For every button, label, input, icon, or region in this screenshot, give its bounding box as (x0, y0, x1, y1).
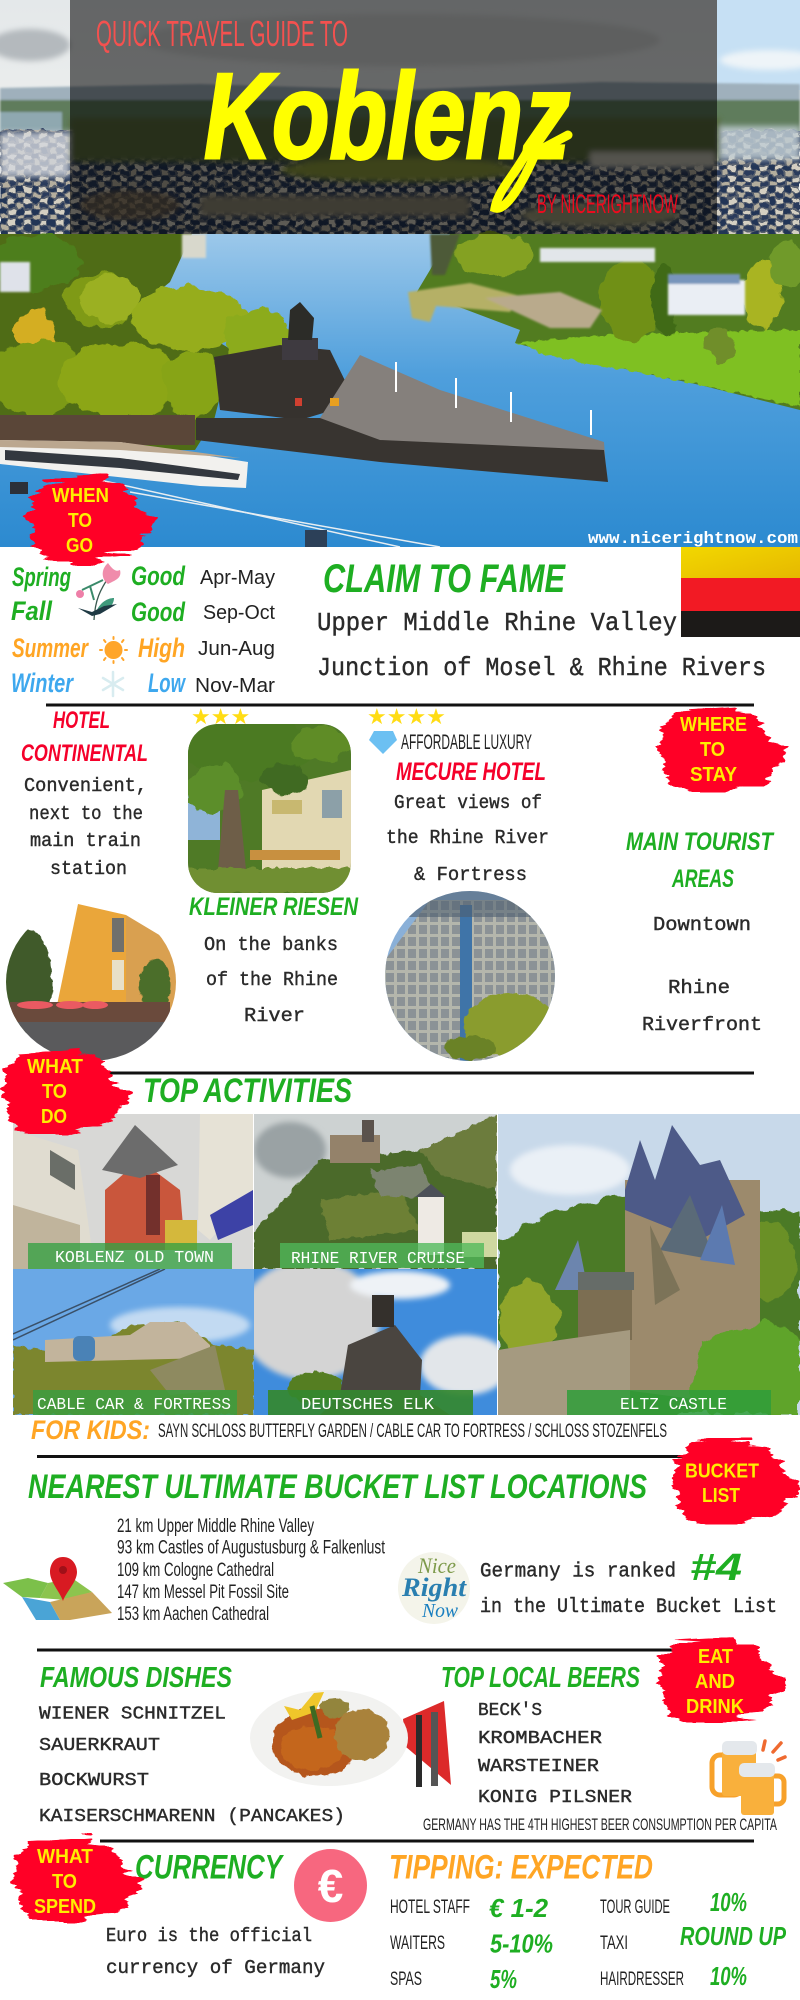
ranking text: Germany is ranked (480, 1560, 676, 1584)
badge: eat and drink: DRINK (686, 1696, 744, 1718)
label: KOBLENZ OLD TOWN (55, 1249, 214, 1268)
photo: Cable Car and Fortress (13, 1269, 254, 1415)
winter row: Low (148, 668, 186, 698)
badge: where to stay: WHERE (680, 714, 747, 736)
distance list: 21 km Upper Middle Rhine Valley (117, 1516, 314, 1537)
hotel description (386, 792, 549, 886)
panel: claim to fame (317, 557, 766, 683)
winter row (11, 668, 275, 698)
label (268, 1390, 473, 1415)
dishes list: SAUERKRAUT (39, 1736, 160, 1756)
claim 1: Upper Middle Rhine Valley (317, 608, 677, 638)
fall row: Sep-Oct (203, 602, 275, 624)
badge: what to spend: TO (52, 1871, 77, 1893)
tip rows left (390, 1893, 553, 1994)
logo: Nice Right Now (398, 1552, 470, 1624)
panel: when to go seasons (11, 561, 275, 698)
three stars: ★★★ (191, 705, 250, 730)
hotel description (204, 934, 338, 1027)
tipping heading: TIPPING: EXPECTED (389, 1849, 653, 1887)
badge: where to stay: TO (700, 739, 725, 761)
ranking text (480, 1547, 777, 1619)
areas list: Downtown (653, 914, 751, 936)
tip rows left: 5% (490, 1964, 517, 1994)
beers list: KROMBACHER (478, 1729, 602, 1749)
hotel description: Convenient, (24, 775, 147, 797)
badge: what to spend: SPEND (34, 1896, 96, 1918)
panel: Kleiner Riesen (184, 705, 359, 1027)
badge: when to go: GO (66, 535, 93, 557)
distance list (117, 1516, 386, 1625)
logo: Nice Right Now: Nice (417, 1553, 456, 1578)
summer row (12, 633, 275, 663)
cruise ship (0, 440, 248, 488)
photo: Rhine River Cruise (254, 1114, 497, 1269)
panel: currency (106, 1849, 367, 1979)
tip rows right: 10% (710, 1887, 747, 1917)
badge: where to stay (658, 707, 785, 791)
hotel name: CONTINENTAL (21, 740, 148, 767)
spring row (12, 561, 275, 592)
dishes heading: FAMOUS DISHES (40, 1662, 233, 1694)
label: CABLE CAR & FORTRESS (37, 1396, 231, 1415)
icon: beer mugs (712, 1741, 785, 1815)
tip rows right: TAXI (600, 1933, 628, 1954)
fall row (11, 596, 275, 627)
hotel description: River (244, 1005, 305, 1027)
badge: what to spend (13, 1838, 140, 1922)
label (567, 1390, 771, 1415)
currency text: currency of Germany (106, 1957, 325, 1979)
hotel photo (6, 904, 176, 1060)
beers list: BECK'S (478, 1701, 542, 1721)
badge: bucket list: BUCKET (685, 1460, 759, 1482)
badge: when to go (27, 477, 154, 561)
badge: what to do (2, 1050, 129, 1134)
tip rows left: WAITERS (390, 1933, 445, 1954)
badge: what to do: DO (41, 1106, 67, 1128)
label (280, 1243, 484, 1269)
logo: Nice Right Now: Right (401, 1573, 467, 1602)
photo: Eltz Castle (498, 1114, 800, 1415)
areas heading: AREAS (671, 865, 734, 893)
affordable luxury tag: AFFORDABLE LUXURY (401, 731, 532, 754)
hotel name: MECURE HOTEL (396, 758, 546, 786)
currency text: Euro is the official (106, 1925, 312, 1947)
hotel name: HOTEL (53, 707, 110, 734)
areas list (642, 914, 762, 1036)
badge: what to spend: WHAT (37, 1846, 93, 1868)
panel: local beers (423, 1662, 785, 1834)
hotel description: the Rhine River (386, 827, 549, 849)
icon: euro coin (294, 1849, 367, 1922)
badge: eat and drink (658, 1638, 785, 1722)
badge: when to go: TO (68, 510, 92, 532)
winter row: Nov-Mar (195, 675, 275, 697)
tip rows left: 5-10% (490, 1928, 553, 1958)
label: DEUTSCHES ELK (301, 1396, 435, 1415)
areas list: Rhine (668, 977, 730, 999)
icon: flower (76, 563, 120, 620)
hotel description: of the Rhine (206, 969, 338, 991)
spring row: Spring (12, 562, 71, 592)
badge: bucket list (672, 1440, 799, 1524)
label: RHINE RIVER CRUISE (291, 1250, 465, 1269)
hotel description (24, 775, 147, 880)
icon: map with pin (3, 1557, 112, 1620)
photo: Deutsches Eck monument (254, 1269, 497, 1415)
photo: schnitzel plate (250, 1690, 451, 1787)
distance list: 153 km Aachen Cathedral (117, 1604, 269, 1625)
ranking text: in the Ultimate Bucket List (480, 1596, 777, 1619)
hotel name (21, 707, 148, 767)
badge: when to go: WHEN (52, 485, 109, 507)
summer row: Jun-Aug (198, 638, 275, 660)
for kids line (31, 1415, 667, 1445)
hotel photo (385, 890, 557, 1062)
panel: Hotel Continental (0, 707, 180, 1067)
panel: Mecure Hotel (367, 705, 557, 1062)
beers list: WARSTEINER (478, 1757, 599, 1777)
hotel description: & Fortress (414, 864, 527, 886)
areas heading (626, 828, 775, 893)
logo: Nice Right Now: Now (421, 1600, 459, 1622)
tip rows right: HAIRDRESSER (600, 1969, 684, 1990)
title overlay panel (70, 0, 717, 234)
byline: BY NICERIGHTNOW (537, 189, 678, 219)
tip rows right (600, 1887, 787, 1991)
badge: what to do: WHAT (27, 1056, 83, 1078)
title kicker: QUICK TRAVEL GUIDE TO (96, 13, 348, 54)
hotel name: KLEINER RIESEN (189, 893, 359, 921)
beers list: KONIG PILSNER (478, 1788, 632, 1808)
cable car lines (100, 480, 440, 547)
distance list: 109 km Cologne Cathedral (117, 1560, 274, 1581)
summer row: High (138, 633, 185, 663)
currency heading: CURRENCY (135, 1849, 285, 1887)
icon: sun (100, 637, 127, 663)
panel: main tourist areas (626, 828, 775, 1036)
winter row: Winter (11, 668, 74, 698)
German flag (681, 547, 800, 637)
hotel photo (184, 720, 351, 893)
hotel description: On the banks (204, 934, 338, 956)
badge: what to do: TO (42, 1081, 67, 1103)
fall row: Good (131, 597, 185, 627)
badge: bucket list: LIST (702, 1485, 740, 1507)
monument and promontory (0, 302, 608, 482)
bucket list heading: NEAREST ULTIMATE BUCKET LIST LOCATIONS (28, 1468, 647, 1506)
claim heading: CLAIM TO FAME (323, 557, 566, 601)
website URL: www.nicerightnow.com (588, 530, 798, 549)
badge: eat and drink: EAT (698, 1646, 733, 1668)
panel: famous dishes (39, 1662, 451, 1827)
hotel description: Great views of (394, 792, 542, 814)
badge: eat and drink: AND (695, 1671, 735, 1693)
dishes list (39, 1705, 345, 1827)
label (28, 1243, 232, 1269)
photo: Koblenz Old Town (13, 1114, 253, 1269)
spring row: Apr-May (200, 567, 275, 589)
beers heading: TOP LOCAL BEERS (441, 1662, 640, 1694)
badge: where to stay: STAY (690, 764, 738, 786)
label: ELTZ CASTLE (620, 1396, 727, 1415)
heading: top activities: TOP ACTIVITIES (143, 1072, 352, 1110)
currency text (106, 1925, 325, 1979)
for kids line: FOR KIDS: (31, 1415, 150, 1445)
four stars: ★★★★ (367, 705, 446, 730)
panel: tipping (389, 1849, 787, 1994)
title: Koblenz: Koblenz (204, 48, 570, 184)
tip rows right: TOUR GUIDE (600, 1897, 670, 1918)
tip rows right: 10% (710, 1961, 747, 1991)
icon: snowflake (103, 672, 123, 696)
beers list (478, 1701, 632, 1808)
spring row: Good (131, 561, 185, 591)
tip rows left: € 1-2 (489, 1893, 549, 1923)
distance list: 93 km Castles of Augustusburg & Falkenlust (117, 1538, 386, 1558)
dishes list: KAISERSCHMARENN (PANCAKES) (39, 1807, 345, 1827)
fall row: Fall (11, 596, 52, 626)
icon: euro coin: € (318, 1860, 343, 1912)
ranking text: #4 (690, 1547, 742, 1589)
hotel description: station (50, 858, 127, 880)
panel: bucket list (3, 1468, 777, 1625)
icon: diamond (369, 731, 397, 754)
dishes list: BOCKWURST (39, 1771, 149, 1791)
hero photo: Deutsches Eck confluence (0, 0, 800, 547)
hotel description: main train (30, 830, 141, 852)
summer row: Summer (12, 633, 89, 663)
distance list: 147 km Messel Pit Fossil Site (117, 1582, 289, 1603)
hotel description: next to the (29, 803, 143, 825)
title: Koblenz (204, 48, 570, 208)
dishes list: WIENER SCHNITZEL (39, 1705, 226, 1725)
tip rows left: HOTEL STAFF (390, 1897, 470, 1918)
areas list: Riverfront (642, 1014, 762, 1036)
tip rows left: SPAS (390, 1969, 422, 1990)
